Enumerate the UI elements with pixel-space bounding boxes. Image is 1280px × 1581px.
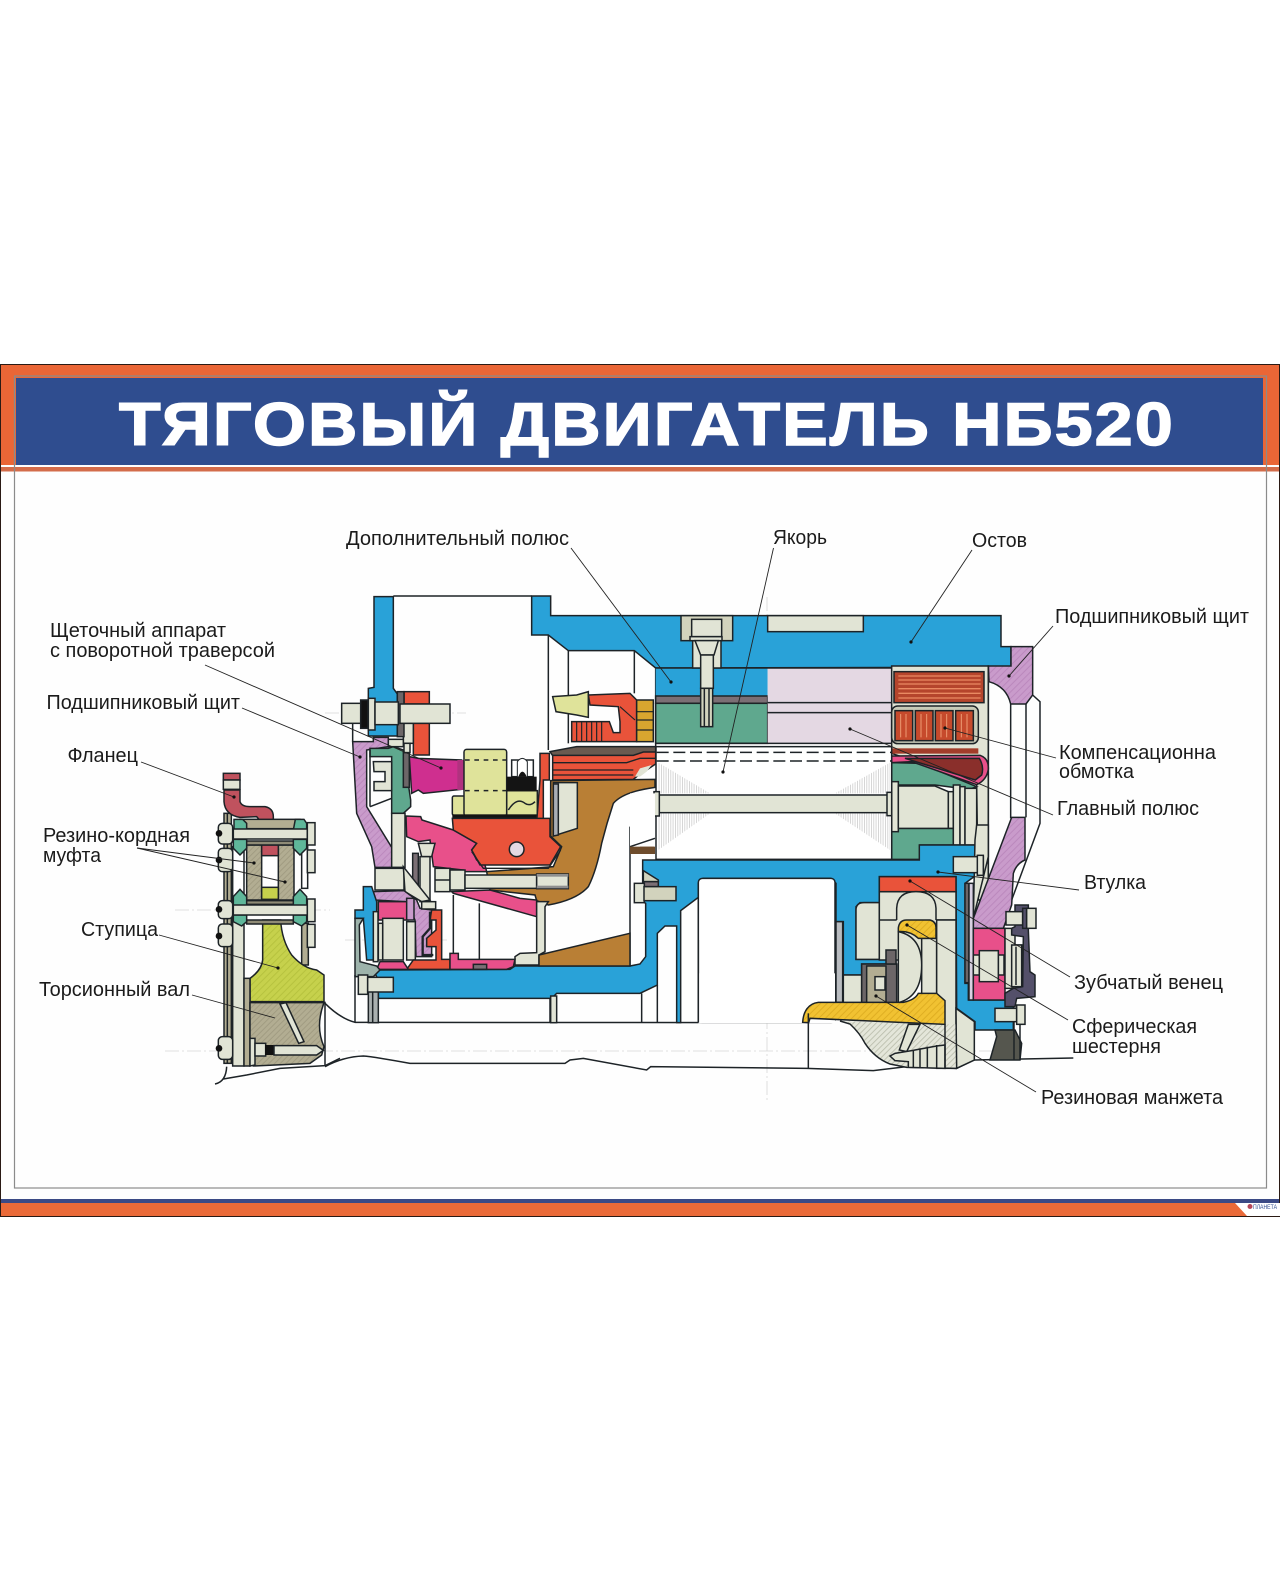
label: ring gear [908, 879, 1223, 994]
label: additional pole: Дополнительный полюс [346, 528, 569, 550]
label: armature: Якорь [773, 527, 827, 549]
label: bushing: Втулка [1084, 872, 1147, 894]
label: flange [68, 745, 236, 799]
label: spherical gear: Сферическая [1072, 1016, 1197, 1038]
right bearing shield [988, 647, 1040, 900]
additional pole bolt [681, 616, 733, 727]
label: compensation winding [943, 726, 1217, 783]
upper housing [353, 596, 1011, 750]
label: right bearing shield: Подшипниковый щит [1055, 606, 1249, 628]
label: frame [909, 530, 1027, 644]
additional pole and main pole core [656, 616, 892, 743]
label: main pole [848, 727, 1199, 820]
label: brush gear: с поворотной траверсой [50, 640, 275, 662]
label: left bearing shield [46, 692, 362, 759]
label: flange: Фланец [68, 745, 138, 767]
label: compensation winding: Компенсационна [1059, 742, 1217, 764]
label: torsion shaft [39, 979, 275, 1018]
label: rubber-cord coupling [43, 825, 287, 884]
label: bushing [936, 870, 1147, 894]
label: rubber-cord coupling: муфта [43, 845, 102, 867]
shaft outline [325, 1056, 1073, 1071]
compensation winding and bearing assembly [892, 666, 988, 900]
labels and leader lines [39, 527, 1249, 1109]
label: brush gear: Щеточный аппарат [50, 620, 226, 642]
brush bolt [435, 868, 568, 892]
left bearing shield and bolt [342, 692, 450, 867]
lower housing [325, 827, 1013, 1030]
motor cross-section diagram [165, 596, 1073, 1100]
label: additional pole [346, 528, 673, 684]
label: spherical gear [905, 923, 1197, 1058]
label: spherical gear: шестерня [1072, 1036, 1161, 1058]
frame mounting bolt [634, 871, 676, 903]
left lower bearing block [355, 843, 630, 1023]
label: hub: Ступица [81, 919, 159, 941]
armature [640, 747, 892, 859]
elastic coupling [215, 773, 340, 1084]
label: torsion shaft: Торсионный вал [39, 979, 190, 1001]
label: rubber-cord coupling: Резино-кордная [43, 825, 190, 847]
label: left bearing shield: Подшипниковый щит [46, 692, 240, 714]
poster frame [0, 364, 1280, 1217]
label: frame: Остов [972, 530, 1027, 552]
label: rubber cuff: Резиновая манжета [1041, 1087, 1224, 1109]
label: rubber cuff [874, 994, 1224, 1109]
title banner: ТЯГОВЫЙ ДВИГАТЕЛЬ НБ520 [119, 391, 1175, 458]
title banner [16, 378, 1263, 465]
drive gear assembly [698, 877, 1022, 1068]
label: ring gear: Зубчатый венец [1074, 972, 1223, 994]
commutator and risers [550, 692, 656, 854]
drive end bearing, cover and bolts [953, 817, 1036, 1024]
centre lines [165, 597, 1020, 1100]
logo tab [1235, 1203, 1280, 1216]
brush rocker assembly [406, 749, 655, 905]
label: brush gear [50, 620, 443, 770]
label: armature [721, 527, 827, 774]
label: right bearing shield [1007, 606, 1249, 678]
label: main pole: Главный полюс [1057, 798, 1199, 820]
label: compensation winding: обмотка [1059, 761, 1135, 783]
label: hub [81, 919, 280, 970]
